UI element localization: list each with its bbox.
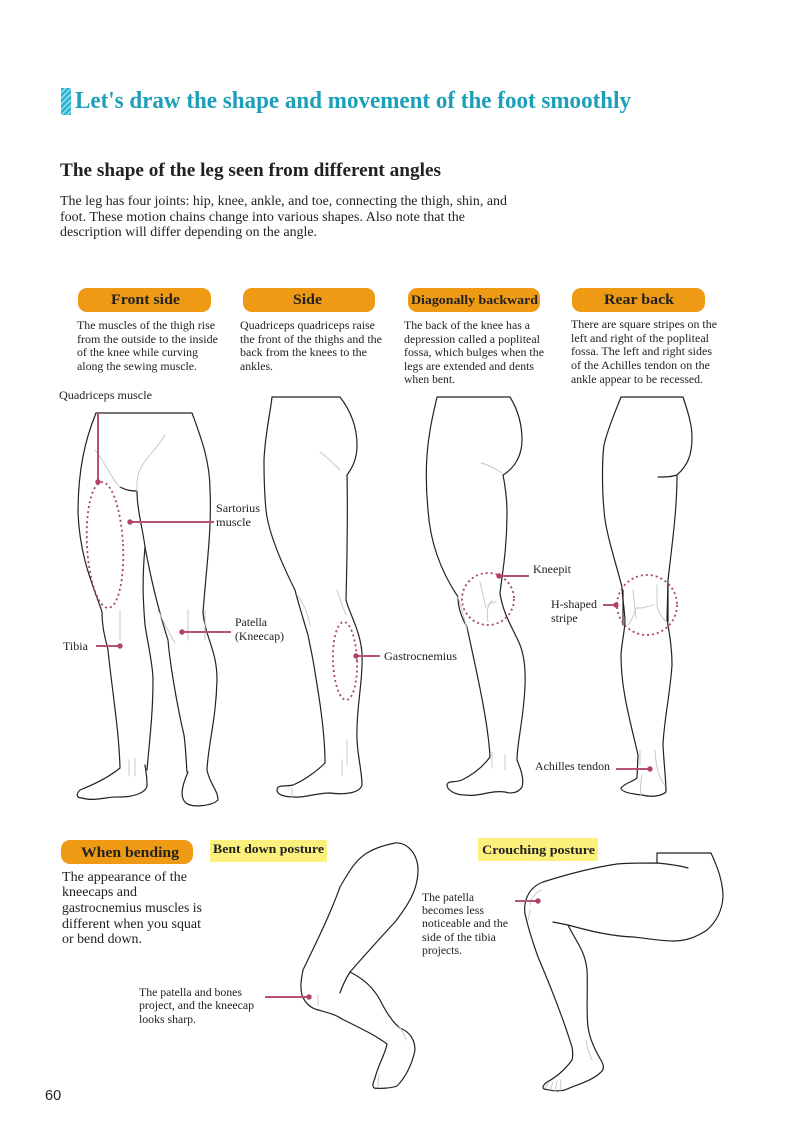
description: diagonally backward: when bent. bbox=[404, 372, 455, 386]
button: when bending bbox=[61, 840, 193, 864]
description: when bending: or bend down. bbox=[62, 932, 142, 947]
label: patella less noticeable: noticeable and the bbox=[422, 916, 508, 930]
description: front side: along the sewing muscle. bbox=[77, 359, 197, 373]
label: kneecap looks sharp bbox=[139, 985, 312, 1026]
label: H-shaped stripe: H-shaped bbox=[551, 597, 597, 611]
button: side bbox=[243, 288, 375, 312]
panel: when bending bbox=[61, 840, 202, 947]
description: rear back: fossa. The left and right sides bbox=[571, 344, 712, 358]
label: tibia bbox=[63, 639, 123, 653]
button: rear back: Rear back bbox=[604, 292, 675, 308]
label: gastrocnemius bbox=[353, 649, 457, 663]
panel: crouching posture bbox=[422, 838, 723, 1091]
panel: bent down posture bbox=[139, 840, 418, 1088]
highlight: H-shaped stripe region bbox=[617, 575, 677, 635]
panel: front side bbox=[59, 288, 284, 806]
description: rear back bbox=[571, 317, 717, 386]
tag: crouching posture bbox=[478, 838, 598, 861]
description: side bbox=[240, 318, 382, 373]
highlight: gastrocnemius region bbox=[332, 622, 358, 700]
description: rear back: of the Achilles tendon on the bbox=[571, 358, 710, 372]
button: front side bbox=[78, 288, 211, 312]
highlight: kneepit region bbox=[462, 573, 514, 625]
label: patella less noticeable bbox=[422, 890, 541, 957]
description: diagonally backward: The back of the knee has a bbox=[404, 318, 531, 332]
label: kneepit bbox=[496, 562, 572, 579]
label: sartorius muscle: muscle bbox=[216, 515, 251, 529]
intro text bbox=[60, 193, 507, 239]
panel: side bbox=[240, 288, 457, 797]
button: diagonally backward: Diagonally backward bbox=[411, 292, 539, 307]
drawing: diagonal leg bbox=[426, 397, 525, 795]
description: front side: of the knee while curving bbox=[77, 345, 198, 359]
description: rear back: left and right of the popliteal bbox=[571, 331, 710, 345]
label: H-shaped stripe bbox=[551, 597, 619, 625]
intro text: description will differ depending on the angle. bbox=[60, 224, 317, 239]
description: side: ankles. bbox=[240, 359, 273, 373]
panel: rear back bbox=[535, 288, 717, 796]
button: front side: Front side bbox=[111, 292, 181, 308]
label: achilles tendon bbox=[535, 759, 653, 773]
label: kneecap looks sharp: looks sharp. bbox=[139, 1012, 196, 1026]
tag: bent down posture: Bent down posture bbox=[213, 841, 324, 856]
label: kneepit: Kneepit bbox=[533, 562, 572, 576]
label: achilles tendon: Achilles tendon bbox=[535, 759, 610, 773]
label: patella less noticeable: becomes less bbox=[422, 903, 484, 917]
button: when bending: When bending bbox=[81, 845, 180, 861]
description: side: back from the knees to the bbox=[240, 345, 367, 359]
description: side: the front of the thighs and the bbox=[240, 332, 382, 346]
drawing: rear leg bbox=[602, 397, 692, 796]
label: patella less noticeable: side of the tibia bbox=[422, 930, 497, 944]
section heading: The shape of the leg seen from different angles bbox=[60, 160, 441, 181]
button: rear back bbox=[572, 288, 705, 312]
description: when bending: kneecaps and bbox=[62, 885, 137, 900]
description: rear back: ankle appear to be recessed. bbox=[571, 372, 703, 386]
drawing: crouching leg bbox=[525, 853, 723, 1091]
button: side: Side bbox=[293, 292, 323, 308]
label: tibia: Tibia bbox=[63, 639, 89, 653]
description: diagonally backward bbox=[404, 318, 544, 386]
panel: diagonally backward bbox=[404, 288, 572, 795]
label: kneecap looks sharp: The patella and bones bbox=[139, 985, 242, 999]
drawing: side leg bbox=[264, 397, 362, 797]
page number: 60 bbox=[45, 1088, 61, 1104]
description: side: Quadriceps quadriceps raise bbox=[240, 318, 375, 332]
tag: crouching posture: Crouching posture bbox=[482, 842, 595, 857]
description: diagonally backward: depression called a popliteal bbox=[404, 332, 541, 346]
label: quadriceps muscle bbox=[59, 388, 152, 485]
description: when bending: different when you squat bbox=[62, 917, 201, 932]
description: front side: The muscles of the thigh rise bbox=[77, 318, 215, 332]
description: rear back: There are square stripes on the bbox=[571, 317, 717, 331]
label: gastrocnemius: Gastrocnemius bbox=[384, 649, 457, 663]
label: sartorius muscle bbox=[127, 501, 260, 529]
label: quadriceps muscle: Quadriceps muscle bbox=[59, 388, 152, 402]
label: patella bbox=[179, 615, 284, 643]
label: H-shaped stripe: stripe bbox=[551, 611, 578, 625]
description: diagonally backward: legs are extended and dents bbox=[404, 359, 534, 373]
title: Let's draw the shape and movement of the foot smoothly bbox=[75, 88, 631, 114]
tag: bent down posture bbox=[210, 840, 327, 862]
label: patella: Patella bbox=[235, 615, 268, 629]
description: when bending bbox=[62, 870, 202, 947]
description: when bending: The appearance of the bbox=[62, 870, 187, 885]
button: diagonally backward bbox=[408, 288, 540, 312]
label: patella less noticeable: The patella bbox=[422, 890, 475, 904]
intro text: foot. These motion chains change into various shapes. Also note that the bbox=[60, 209, 465, 224]
label: kneecap looks sharp: project, and the kneecap bbox=[139, 998, 254, 1012]
highlight: quadriceps region bbox=[84, 481, 126, 609]
label: sartorius muscle: Sartorius bbox=[216, 501, 260, 515]
drawing: bent leg bbox=[301, 843, 418, 1088]
drawing: front leg bbox=[77, 413, 218, 806]
label: patella: (Kneecap) bbox=[235, 629, 284, 643]
description: front side bbox=[77, 318, 218, 373]
description: front side: from the outside to the inside bbox=[77, 332, 218, 346]
description: when bending: gastrocnemius muscles is bbox=[62, 901, 202, 916]
description: diagonally backward: fossa, which bulges when the bbox=[404, 345, 544, 359]
label: patella less noticeable: projects. bbox=[422, 943, 462, 957]
intro text: The leg has four joints: hip, knee, ankle, and toe, connecting the thigh, shin, and bbox=[60, 193, 507, 208]
